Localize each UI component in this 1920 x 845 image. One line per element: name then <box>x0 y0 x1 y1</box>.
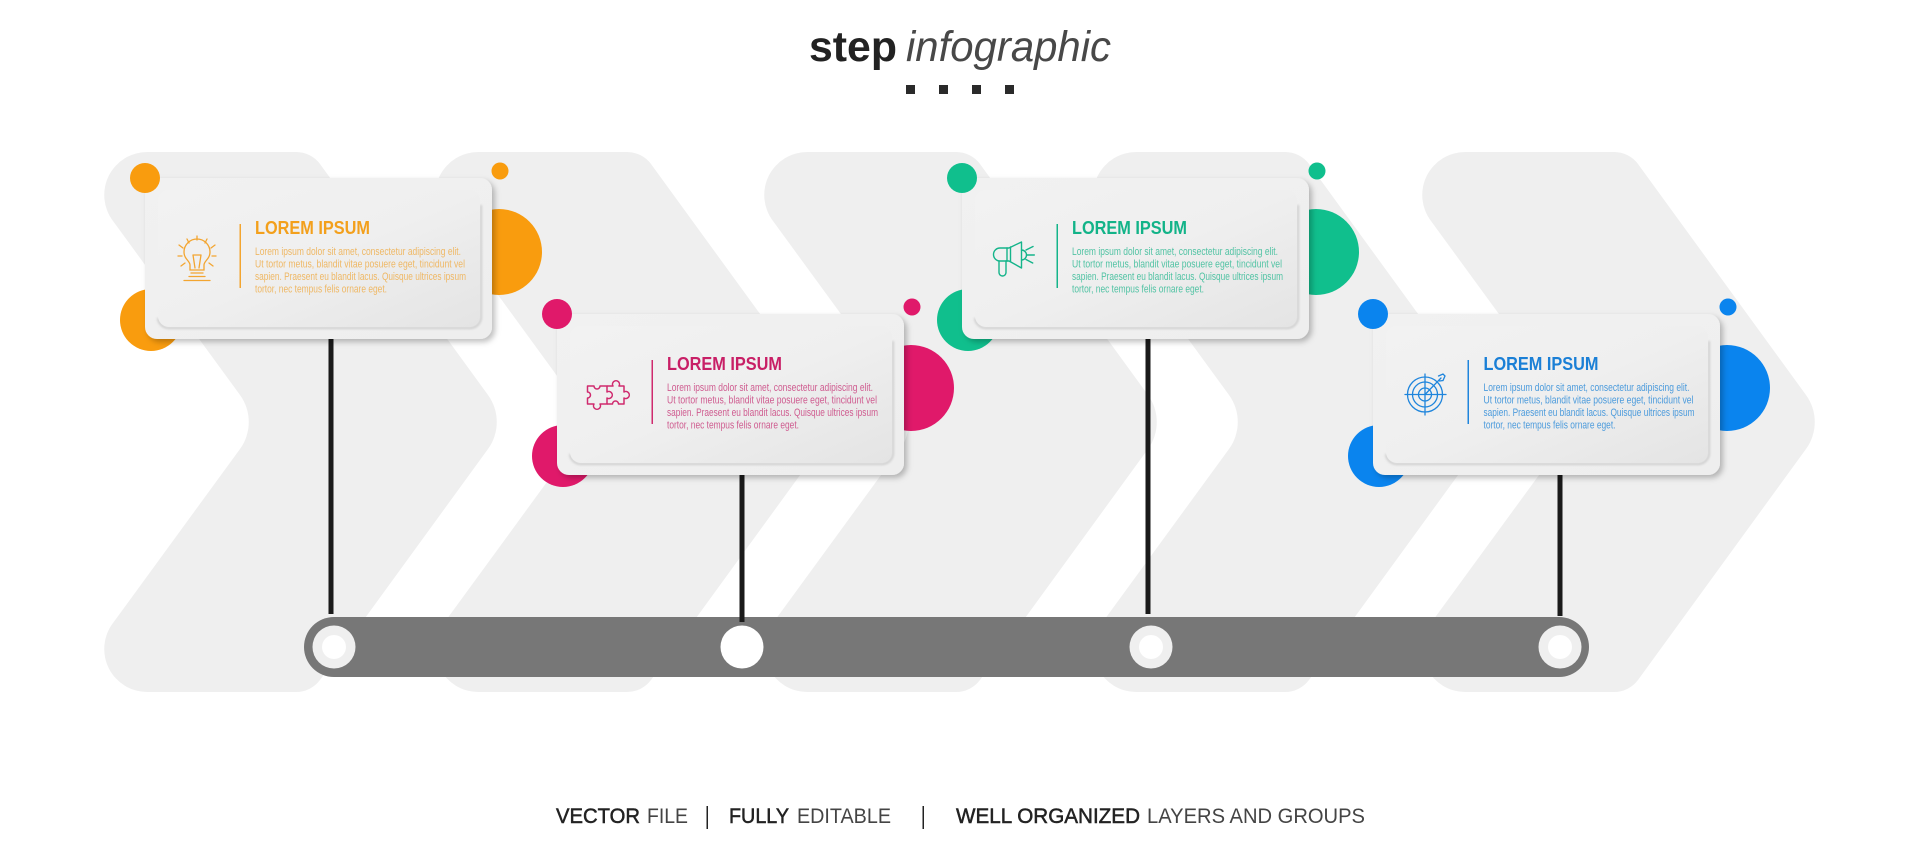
body text: Lorem ipsum dolor sit amet, consectetur adipiscing elit. <box>1072 246 1278 258</box>
icon: megaphone <box>994 242 1034 276</box>
footer caption: FILE <box>647 805 688 828</box>
icon: puzzle <box>588 381 629 409</box>
chevron 2 <box>435 152 828 692</box>
panel: step 4 blue <box>1348 298 1770 487</box>
card <box>145 178 492 339</box>
card <box>962 178 1309 339</box>
divider <box>652 360 653 424</box>
title dots <box>906 85 1014 94</box>
body text <box>1072 246 1283 296</box>
body text: Ut tortor metus, blandit vitae posuere eget, tincidunt vel <box>255 258 465 270</box>
footer caption: WELL ORGANIZED <box>956 805 1140 828</box>
divider <box>1056 224 1058 288</box>
chevron 5 <box>1422 152 1815 692</box>
title <box>809 23 1111 71</box>
body text: tortor, nec tempus felis ornare eget. <box>667 420 799 432</box>
timeline node 3 <box>1130 626 1172 668</box>
chevron 3 <box>764 152 1157 692</box>
body text <box>255 246 466 296</box>
card inner <box>975 190 1297 327</box>
card inner edge shadow <box>1386 341 1709 464</box>
card inner edge shadow <box>570 341 893 464</box>
body text: sapien. Praesent eu blandit lacus. Quisque ultrices ipsum <box>255 271 466 283</box>
card inner <box>158 190 480 327</box>
body text: tortor, nec tempus felis ornare eget. <box>1072 284 1204 296</box>
panel: step 3 green <box>937 162 1359 351</box>
card <box>557 314 904 475</box>
card <box>1373 314 1720 475</box>
decorative circles <box>532 345 954 487</box>
icon: light bulb <box>178 236 216 280</box>
title: step <box>809 23 897 71</box>
body text: sapien. Praesent eu blandit lacus. Quisque ultrices ipsum <box>1484 407 1695 419</box>
footer caption <box>556 805 1365 829</box>
chevron 4 <box>1093 152 1486 692</box>
body text: sapien. Praesent eu blandit lacus. Quisque ultrices ipsum <box>667 407 878 419</box>
top dots <box>947 162 1326 193</box>
heading: LOREM IPSUM <box>667 353 782 374</box>
body text: Lorem ipsum dolor sit amet, consectetur adipiscing elit. <box>1484 382 1690 394</box>
timeline bar <box>304 617 1589 677</box>
body text: tortor, nec tempus felis ornare eget. <box>1484 420 1616 432</box>
panel: step 1 orange <box>120 162 542 351</box>
top dots <box>1358 298 1736 329</box>
decorative circles <box>1348 345 1770 487</box>
body text: Ut tortor metus, blandit vitae posuere eget, tincidunt vel <box>1484 394 1694 406</box>
divider <box>1468 360 1469 424</box>
background chevrons <box>104 152 1815 692</box>
body text <box>1484 382 1695 432</box>
body text: Ut tortor metus, blandit vitae posuere eget, tincidunt vel <box>667 394 877 406</box>
heading: LOREM IPSUM <box>255 217 370 238</box>
panel: step 2 pink <box>532 298 954 487</box>
connector lines <box>328 335 1562 622</box>
body text: Ut tortor metus, blandit vitae posuere eget, tincidunt vel <box>1072 258 1282 270</box>
timeline node 1 <box>312 626 356 668</box>
body text <box>667 382 878 432</box>
heading: LOREM IPSUM <box>1072 217 1187 238</box>
card inner edge shadow <box>975 205 1298 328</box>
card inner <box>570 326 892 463</box>
decorative circles <box>120 209 542 351</box>
footer caption: FULLY <box>729 805 789 828</box>
card inner <box>1386 326 1708 463</box>
icon: target <box>1405 374 1446 415</box>
footer caption: LAYERS AND GROUPS <box>1147 805 1365 828</box>
heading: LOREM IPSUM <box>1484 353 1598 374</box>
timeline node 4 <box>1538 626 1582 668</box>
body text: Lorem ipsum dolor sit amet, consectetur adipiscing elit. <box>255 246 461 258</box>
body text: Lorem ipsum dolor sit amet, consectetur adipiscing elit. <box>667 382 873 394</box>
body text: tortor, nec tempus felis ornare eget. <box>255 284 387 296</box>
card inner edge shadow <box>158 205 481 328</box>
timeline node 2 <box>720 626 764 668</box>
divider <box>240 224 241 288</box>
chevron 1 <box>104 152 497 692</box>
top dots <box>542 298 920 329</box>
title: infographic <box>906 23 1111 71</box>
footer caption: EDITABLE <box>797 805 891 828</box>
decorative circles <box>937 209 1359 351</box>
top dots <box>130 162 508 193</box>
footer caption: VECTOR <box>556 805 640 828</box>
body text: sapien. Praesent eu blandit lacus. Quisque ultrices ipsum <box>1072 271 1283 283</box>
